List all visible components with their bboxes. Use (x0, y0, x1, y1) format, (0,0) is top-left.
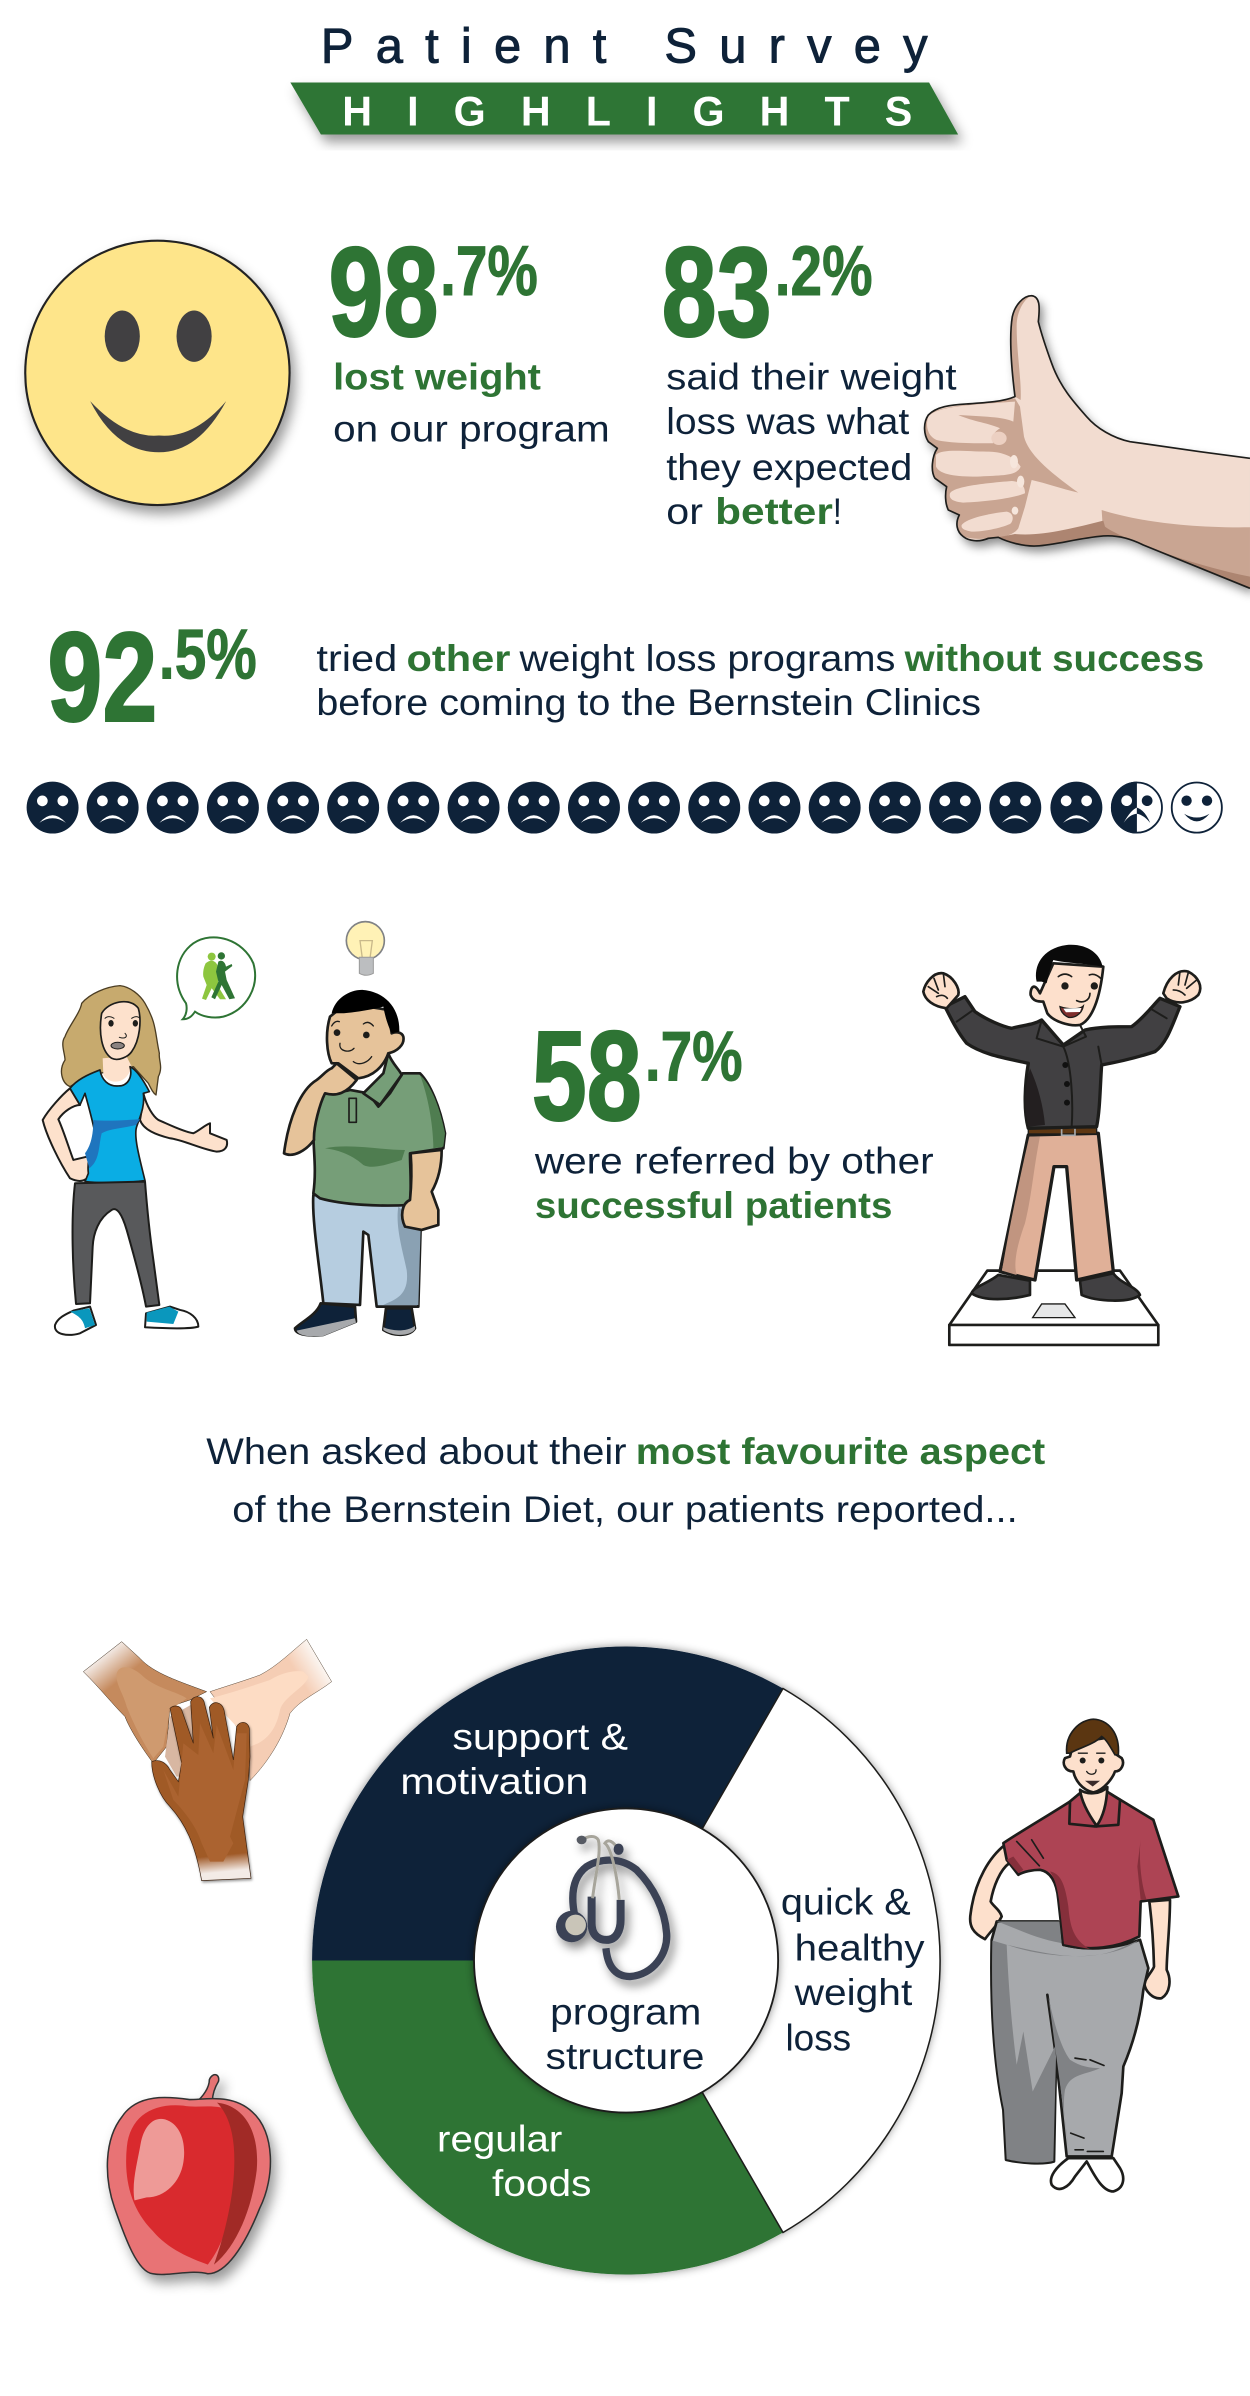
stat: 98.7% lost weight: .7% (440, 231, 538, 310)
label: support and motivation: support & (452, 1717, 628, 1758)
segment: quick and healthy weight loss (702, 1689, 940, 2232)
segment: support and motivation (312, 1646, 783, 1961)
stat: 83.2% as expected or better: loss was what (666, 401, 909, 442)
chart: favourite aspect donut (312, 1646, 940, 2275)
icon: idea light bulb (346, 922, 384, 975)
stat: 98.7% lost weight: 98 (329, 221, 439, 363)
label: support and motivation (400, 1717, 628, 1802)
stat: 58.7% referred by patients (532, 1005, 934, 1226)
stat: 58.7% referred by patients: .7% (645, 1016, 743, 1095)
label: quick and healthy weight loss: loss (785, 2018, 851, 2059)
text: favourite aspect intro: When asked about their (206, 1430, 627, 1472)
title: Patient Survey (321, 20, 928, 74)
icon: man with oversized trousers (970, 1719, 1178, 2191)
text: favourite aspect intro: most favourite aspect (636, 1430, 1045, 1472)
stat: 98.7% lost weight: lost weight (333, 357, 541, 398)
stat: 92.5% tried other programs: 92 (47, 606, 157, 748)
stat: 92.5% tried other programs: .5% (159, 614, 257, 693)
stat: 83.2% as expected or better: said their weight (666, 357, 957, 398)
centre: program structure (474, 1808, 778, 2113)
icon: thinking man (284, 990, 445, 1336)
stat: 92.5% tried other programs: weight loss programs (518, 638, 895, 679)
label: regular foods (437, 2119, 591, 2204)
stat: 58.7% referred by patients: 58 (532, 1005, 642, 1147)
label: quick and healthy weight loss (781, 1882, 925, 2059)
icon: red apple (107, 2075, 270, 2274)
label: quick and healthy weight loss: healthy (795, 1928, 925, 1969)
stat: 92.5% tried other programs (47, 606, 1204, 748)
stat: 92.5% tried other programs: before coming to the Bernstein Clinics (316, 682, 981, 723)
icon row: sad and happy faces (27, 782, 1222, 834)
icon: smiley face (25, 241, 290, 505)
stat: 83.2% as expected or better: or (666, 491, 703, 532)
label: program structure: structure (546, 2036, 704, 2077)
icon: speech bubble with walkers (177, 937, 255, 1019)
stat: 58.7% referred by patients: successful patients (535, 1185, 892, 1226)
icon: thumbs up hand (925, 296, 1250, 588)
stat: 83.2% as expected or better: ! (833, 491, 842, 532)
stat: 83.2% as expected or better: they expected (666, 447, 912, 488)
label: program structure (546, 1992, 704, 2077)
text: favourite aspect intro: of the Bernstein Diet, our patients reported... (232, 1488, 1018, 1530)
stat: 92.5% tried other programs: other (406, 638, 510, 679)
segment: regular foods (312, 1961, 783, 2275)
label: program structure: program (550, 1992, 701, 2033)
label: regular foods: foods (492, 2163, 591, 2204)
stat: 83.2% as expected or better: better (715, 491, 833, 532)
stat: 58.7% referred by patients: were referred by other (534, 1141, 934, 1182)
icon: man celebrating on scale (923, 945, 1200, 1345)
text: favourite aspect intro (206, 1430, 1045, 1530)
stat: 92.5% tried other programs: without success (904, 638, 1204, 679)
banner: highlights: HIGHLIGHTS (342, 88, 912, 134)
label: quick and healthy weight loss: quick & (781, 1882, 911, 1923)
stat: 83.2% as expected or better: .2% (775, 231, 873, 310)
icon: woman talking (43, 986, 227, 1335)
label: regular foods: regular (437, 2119, 562, 2160)
stat: 83.2% as expected or better (662, 221, 957, 532)
icon: stethoscope (556, 1836, 667, 1977)
stat: 98.7% lost weight (329, 221, 610, 450)
stat: 92.5% tried other programs: tried (316, 638, 397, 679)
stat: 83.2% as expected or better: 83 (662, 221, 772, 363)
label: support and motivation: motivation (400, 1761, 588, 1802)
label: quick and healthy weight loss: weight (794, 1972, 912, 2013)
icon: joined hands (83, 1639, 332, 1881)
stat: 98.7% lost weight: on our program (333, 409, 610, 450)
